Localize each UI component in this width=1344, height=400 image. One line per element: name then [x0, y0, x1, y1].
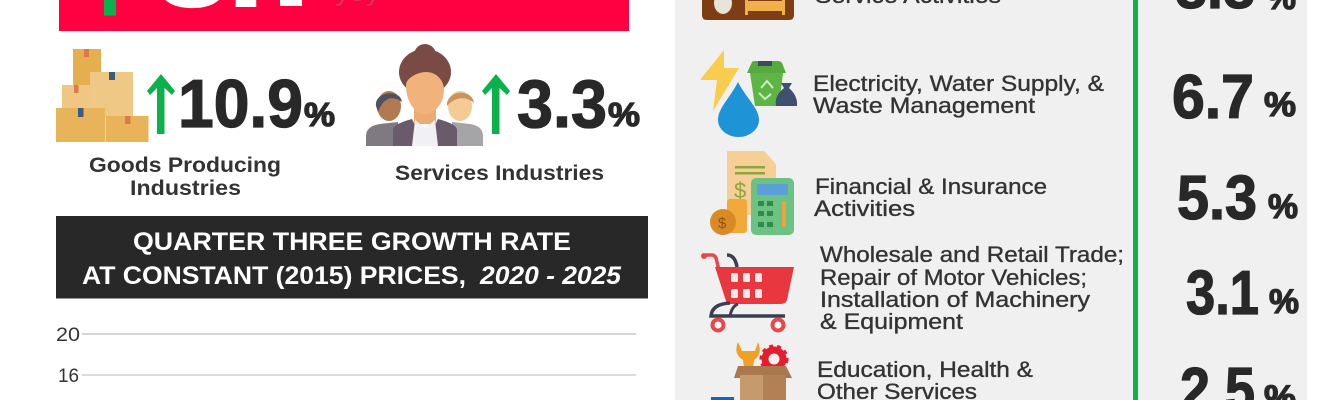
- divider: green vertical rule: [1133, 0, 1138, 400]
- value: wholesale: %: [1269, 283, 1299, 321]
- text: goods label: Goods Producing: [89, 154, 281, 177]
- text: electricity label: [813, 71, 1104, 118]
- icon: stacked cardboard boxes: [56, 49, 148, 142]
- text: financial label: Financial & Insurance: [815, 174, 1047, 199]
- text: wholesale label: Wholesale and Retail Trade;: [820, 242, 1124, 267]
- text: electricity label: Waste Management: [813, 93, 1035, 118]
- icon: lightning, water and waste: [700, 50, 797, 137]
- text: wholesale label: [820, 242, 1124, 334]
- arrow: goods up: [147, 74, 175, 134]
- text: goods label: Industries: [130, 177, 241, 200]
- line chart: axis and grid: 16: [58, 366, 79, 387]
- value: wholesale: 3.1: [1186, 259, 1259, 328]
- line chart: axis and grid: [56, 325, 636, 387]
- icon: invoice, calculator and coins: $: [734, 178, 746, 203]
- value: financial: 5.3: [1177, 164, 1257, 233]
- text: education label: Education, Health &: [817, 357, 1033, 382]
- panel: red headline banner: [59, 0, 629, 31]
- text: wholesale label: Installation of Machinery: [820, 287, 1090, 312]
- text: services label: Services Industries: [395, 162, 604, 185]
- text: education label: [817, 357, 1033, 400]
- value: financial: %: [1268, 188, 1298, 226]
- panel: chart heading: QUARTER THREE GROWTH RATE: [133, 228, 571, 256]
- value: electricity: [1172, 63, 1296, 132]
- text: wholesale label: Repair of Motor Vehicles;: [820, 265, 1087, 290]
- text: financial label: Activities: [814, 196, 915, 221]
- panel: chart heading: AT CONSTANT (2015) PRICES,: [82, 262, 466, 290]
- icon: tools in a box: [711, 342, 792, 400]
- value: electricity: 6.7: [1172, 63, 1254, 132]
- line chart: axis and grid: 20: [56, 325, 80, 346]
- stat: services growth value: 3.3: [517, 66, 607, 142]
- text: financial label: [814, 174, 1047, 221]
- text: electricity label: Electricity, Water Supply, &: [813, 71, 1104, 96]
- icon: shopping cart: [701, 253, 794, 330]
- text: goods label: [89, 154, 281, 200]
- panel: chart heading: [56, 216, 648, 298]
- value: electricity: %: [1264, 86, 1296, 124]
- arrow: services up: [482, 74, 510, 134]
- icon: invoice, calculator and coins: [710, 151, 794, 235]
- stat: services growth value: %: [608, 96, 640, 133]
- panel: chart heading: 2020 - 2025: [479, 262, 622, 290]
- icon: invoice, calculator and coins: $: [718, 215, 727, 232]
- stat: goods growth value: %: [304, 96, 335, 133]
- panel: sector growth: [675, 0, 1307, 400]
- text: wholesale label: & Equipment: [820, 309, 963, 334]
- icon: group of service workers: [366, 44, 483, 146]
- icon: accommodation and food: [702, 0, 794, 20]
- stat: goods growth value: 10.9: [178, 66, 303, 142]
